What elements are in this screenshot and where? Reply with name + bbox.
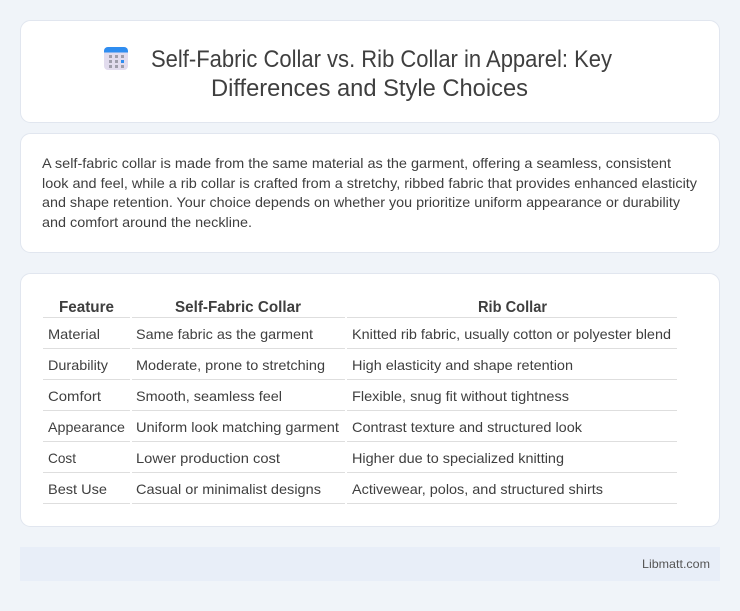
title: Self-Fabric Collar vs. Rib Collar in Apparel: Key xyxy=(151,46,612,73)
panel: intro text: and comfort around the neckline. xyxy=(42,214,252,230)
footer: Libmatt.com xyxy=(642,557,710,571)
row: comfort: Comfort xyxy=(48,388,101,404)
row: material: Knitted rib fabric, usually cotton or polyester blend xyxy=(352,326,671,342)
row: durability: Durability xyxy=(48,357,108,373)
panel: intro text: look and feel, while a rib collar is crafted from a stretchy, ribbed fabric that provides enhanced elasticity xyxy=(42,175,697,191)
title xyxy=(151,46,612,102)
row: best use: Best Use xyxy=(48,481,107,497)
footer xyxy=(20,547,720,581)
panel: header xyxy=(20,20,720,122)
row: appearance xyxy=(48,419,583,435)
row: cost: Lower production cost xyxy=(136,450,280,466)
row: cost xyxy=(48,450,564,466)
row: cost: Higher due to specialized knitting xyxy=(352,450,564,466)
table header row: Rib Collar xyxy=(478,299,547,316)
row: cost: Cost xyxy=(48,450,76,466)
panel: intro text xyxy=(20,134,720,252)
table header row xyxy=(59,299,547,316)
row: material: Material xyxy=(48,326,100,342)
row: durability xyxy=(48,357,573,373)
row: comfort: Smooth, seamless feel xyxy=(136,388,282,404)
row: durability: High elasticity and shape retention xyxy=(352,357,573,373)
row: material xyxy=(48,326,671,342)
row: appearance: Appearance xyxy=(48,419,125,435)
row: appearance: Uniform look matching garment xyxy=(136,419,339,435)
table header row: Self-Fabric Collar xyxy=(175,299,301,316)
panel: intro text: and shape retention. Your choice depends on whether you prioritize uniform appearance or durability xyxy=(42,194,680,210)
row: material: Same fabric as the garment xyxy=(136,326,313,342)
icon: calendar xyxy=(104,47,128,70)
row: comfort xyxy=(48,388,569,404)
row: comfort: Flexible, snug fit without tightness xyxy=(352,388,569,404)
row: appearance: Contrast texture and structured look xyxy=(352,419,583,435)
row: best use: Activewear, polos, and structured shirts xyxy=(352,481,603,497)
table header row: Feature xyxy=(59,299,114,316)
row: durability: Moderate, prone to stretching xyxy=(136,357,325,373)
title: Differences and Style Choices xyxy=(211,75,528,102)
panel: comparison table xyxy=(20,274,720,526)
row: best use xyxy=(48,481,603,497)
row: best use: Casual or minimalist designs xyxy=(136,481,321,497)
panel: intro text: A self-fabric collar is made from the same material as the garment, offering a seamless, consistent xyxy=(42,155,671,171)
